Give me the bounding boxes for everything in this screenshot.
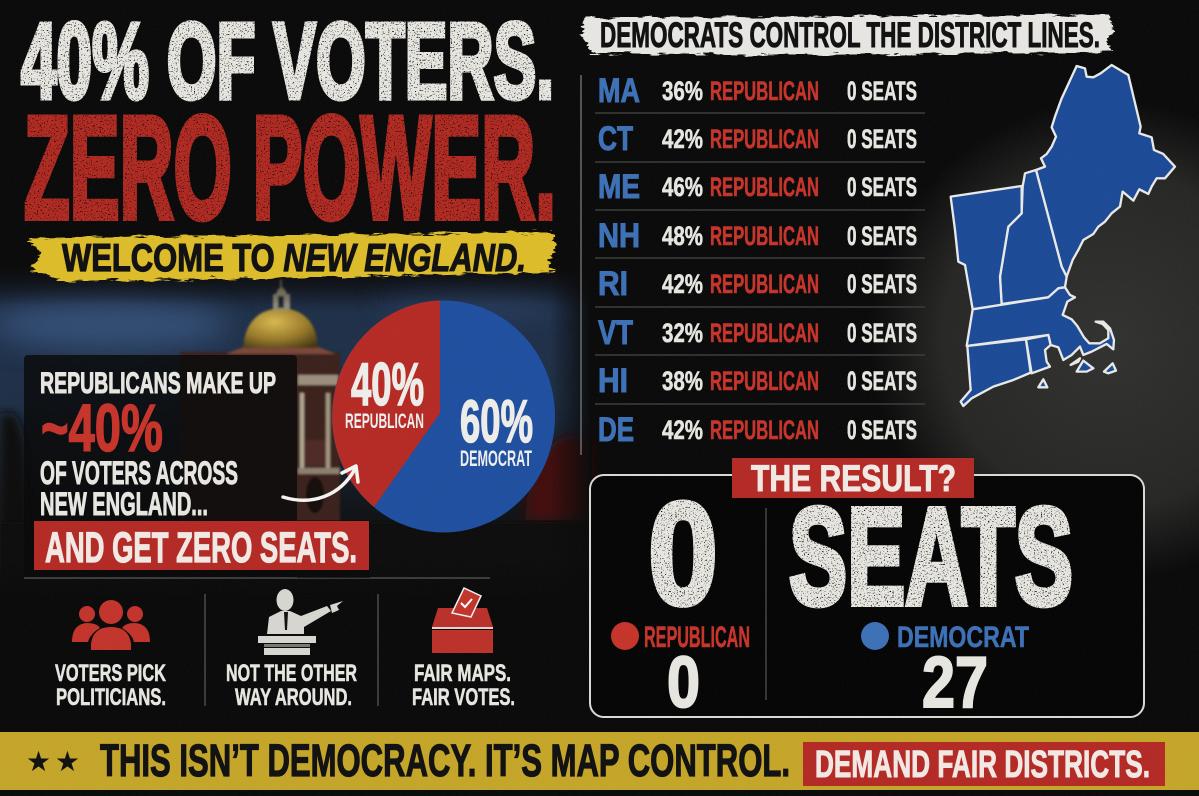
- row: NH: [598, 217, 917, 255]
- democrat seat count: [861, 621, 1029, 723]
- republican seat count: [611, 621, 750, 723]
- row: ME: REPUBLICAN: [710, 172, 819, 202]
- row: ME: ME: [598, 168, 640, 206]
- state: Maine: [1036, 65, 1175, 277]
- label: democrat: DEMOCRAT: [460, 446, 532, 471]
- map glow: [870, 60, 1199, 590]
- slogan: THIS ISN’T DEMOCRACY. IT’S MAP CONTROL.: [100, 735, 790, 786]
- row: MA: MA: [598, 72, 640, 110]
- state: Massachusetts: [967, 287, 1114, 360]
- arrow: [283, 466, 358, 500]
- democrat seat count: DEMOCRAT: [897, 621, 1029, 654]
- result heading: THE RESULT?: [751, 458, 956, 499]
- row: MA: 36%: [662, 76, 703, 106]
- row: CT: [598, 120, 917, 158]
- title line 2: ZERO POWER.: [24, 86, 556, 249]
- title line 1: 40% OF VOTERS.: [21, 0, 554, 121]
- democrat seat count: 27: [922, 643, 988, 723]
- icon: politician at podium: [258, 589, 343, 655]
- podium caption: [226, 660, 357, 711]
- row: DE: REPUBLICAN: [710, 415, 819, 445]
- row: VT: VT: [598, 314, 633, 352]
- row: ME: [598, 168, 917, 206]
- photo background: state house at dusk: [0, 265, 592, 600]
- row: NH: NH: [598, 217, 640, 255]
- state: Vermont: [951, 186, 1022, 309]
- row: NH: 48%: [662, 221, 703, 251]
- row: NH: 0 SEATS: [847, 221, 917, 251]
- icon: voters: [72, 600, 150, 650]
- state: Connecticut: [961, 339, 1031, 406]
- row: RI: [598, 265, 917, 303]
- row: DE: [598, 411, 917, 449]
- row: CT: CT: [598, 120, 633, 158]
- label: republican: REPUBLICAN: [345, 410, 424, 433]
- panel: result: [590, 458, 1144, 723]
- ballot caption: FAIR MAPS.: [414, 660, 511, 687]
- podium caption: NOT THE OTHER: [226, 660, 357, 687]
- label: 60%: 60%: [460, 388, 533, 455]
- row: HI: HI: [598, 362, 628, 400]
- republican seat count: 0: [667, 643, 700, 723]
- republican seat count: REPUBLICAN: [644, 621, 750, 654]
- row: RI: RI: [598, 265, 628, 303]
- podium caption: WAY AROUND.: [235, 684, 352, 711]
- row: HI: 0 SEATS: [847, 366, 917, 396]
- voters caption: POLITICIANS.: [56, 684, 166, 711]
- panel: republican share: [24, 355, 490, 578]
- row: NH: REPUBLICAN: [710, 221, 819, 251]
- subtitle banner: [28, 232, 556, 281]
- row: VT: [598, 314, 917, 352]
- row: HI: REPUBLICAN: [710, 366, 819, 396]
- row: DE: DE: [598, 411, 634, 449]
- row: VT: REPUBLICAN: [710, 318, 819, 348]
- row: MA: REPUBLICAN: [710, 76, 819, 106]
- stars: ★★: [26, 745, 80, 778]
- state: New Hampshire: [1000, 170, 1067, 304]
- slice: republican: [332, 300, 440, 507]
- title: [21, 0, 556, 249]
- ballot caption: FAIR VOTES.: [412, 684, 515, 711]
- big zero: 0: [648, 472, 718, 635]
- panel text line 1: REPUBLICANS MAKE UP: [40, 367, 276, 400]
- row: RI: 0 SEATS: [847, 269, 917, 299]
- row: CT: 0 SEATS: [847, 124, 917, 154]
- row: RI: 42%: [662, 269, 703, 299]
- row: DE: 42%: [662, 415, 703, 445]
- callout: and get zero seats: [34, 521, 369, 572]
- row: VT: 32%: [662, 318, 703, 348]
- row: CT: REPUBLICAN: [710, 124, 819, 154]
- row: HI: [598, 362, 917, 400]
- row: ME: 0 SEATS: [847, 172, 917, 202]
- bottom banner: [0, 732, 1199, 790]
- row: VT: 0 SEATS: [847, 318, 917, 348]
- heading: district lines: [582, 15, 1114, 55]
- voters caption: VOTERS PICK: [55, 660, 166, 687]
- row: RI: REPUBLICAN: [710, 269, 819, 299]
- row: MA: 0 SEATS: [847, 76, 917, 106]
- icon: ballot box: [432, 588, 493, 653]
- row: ME: 46%: [662, 172, 703, 202]
- row: DE: 0 SEATS: [847, 415, 917, 445]
- label: 40%: 40%: [351, 351, 424, 418]
- callout: and get zero seats: AND GET ZERO SEATS.: [45, 524, 357, 572]
- voters caption: [55, 660, 166, 711]
- panel text line 3: NEW ENGLAND...: [40, 486, 208, 522]
- panel text line 2: OF VOTERS ACROSS: [40, 455, 238, 491]
- row: MA: [598, 72, 917, 110]
- big percent: ~40%: [41, 391, 163, 466]
- pie chart: [332, 300, 555, 532]
- ballot caption: [412, 660, 515, 711]
- map: New England: [951, 65, 1175, 406]
- state: Rhode Island: [1026, 335, 1051, 373]
- subtitle text: WELCOME TO NEW ENGLAND.: [62, 237, 526, 280]
- islands: [1038, 358, 1116, 387]
- row: CT: 42%: [662, 124, 703, 154]
- row: HI: 38%: [662, 366, 703, 396]
